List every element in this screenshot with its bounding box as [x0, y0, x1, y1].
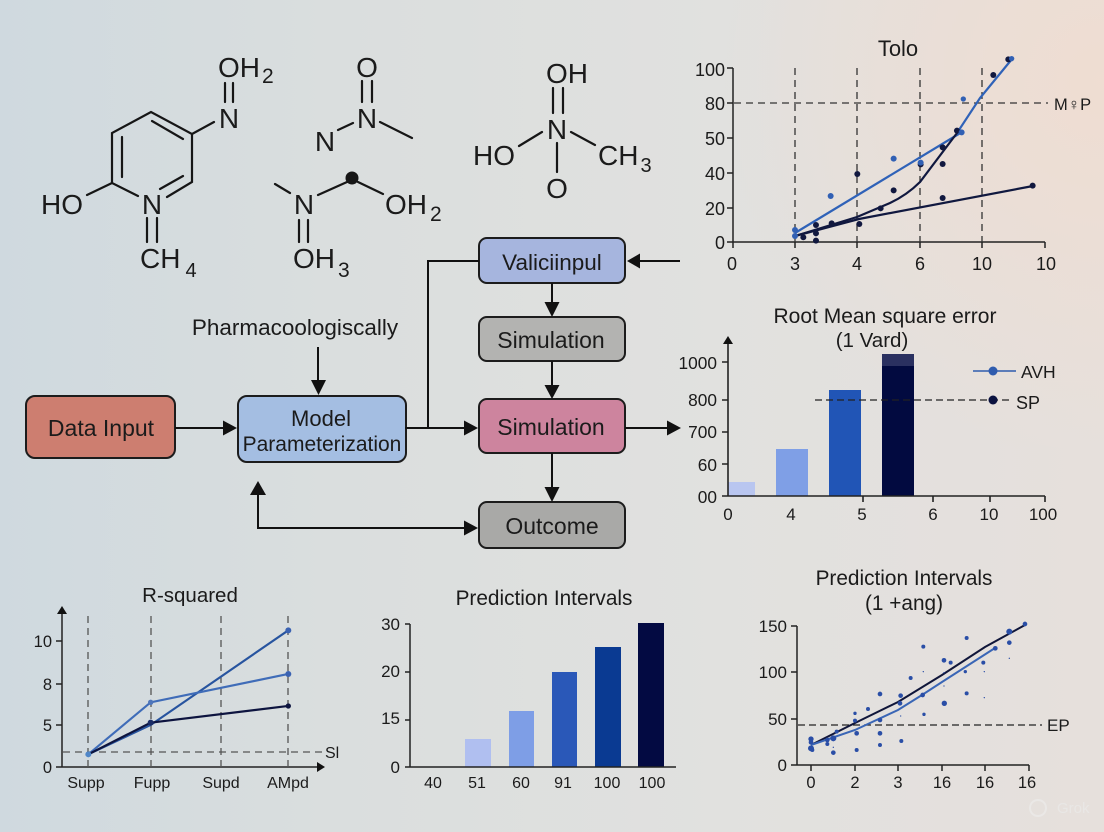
molecule: nitroso fragment: N: [357, 103, 377, 134]
molecule: lower fragment: N: [294, 189, 314, 220]
axis arrowheads: [57, 606, 325, 772]
chart title: Root Mean square error: [774, 305, 996, 328]
molecule: ring structure: N: [142, 189, 162, 220]
chart title: Prediction Intervals: [816, 567, 992, 590]
chart: Tolo line scatter: [695, 36, 1091, 274]
molecule: right structure: N: [547, 114, 567, 145]
y-axis labels: 100: [759, 663, 787, 682]
x-axis labels: [67, 775, 309, 792]
x-axis labels: 2: [850, 774, 860, 792]
molecule: nitroso fragment: O: [356, 52, 378, 83]
y-axis labels: 150: [759, 617, 787, 636]
x-axis labels: 16: [976, 774, 994, 792]
y-axis labels: 0: [391, 758, 400, 777]
molecule: ring structure: [41, 52, 274, 282]
x-axis labels: 4: [852, 254, 862, 274]
x-axis labels: 3: [790, 254, 800, 274]
y-axis labels: [759, 617, 787, 775]
series lines: [795, 59, 1033, 236]
x-axis labels: 40: [424, 775, 442, 792]
y-axis labels: [381, 615, 400, 777]
reference label: EP: [1047, 716, 1070, 735]
arrow: pharmacologically to model: [311, 347, 326, 395]
x-axis labels: 51: [468, 775, 486, 792]
y-axis labels: 20: [705, 199, 725, 219]
y-axis labels: 60: [698, 455, 717, 475]
arrow: data input to model: [175, 420, 237, 436]
x-axis labels: 60: [512, 775, 530, 792]
axes: [727, 68, 1045, 248]
x-axis labels: Supp: [67, 775, 105, 792]
molecule: lower fragment: 2: [430, 203, 442, 226]
x-axis labels: 5: [857, 505, 867, 524]
x-axis labels: 4: [786, 505, 796, 524]
molecule: lower fragment: OH: [293, 243, 335, 274]
box: outcome: Outcome: [505, 513, 599, 539]
x-axis labels: 0: [727, 254, 737, 274]
x-axis labels: 10: [972, 254, 992, 274]
flowchart: [26, 238, 681, 548]
box: simulation pink: Simulation: [497, 414, 605, 440]
x-axis labels: [727, 254, 1056, 274]
molecule: lower fragment: OH: [385, 189, 427, 220]
box: simulation grey: Simulation: [497, 327, 605, 353]
watermark: Grok: [1057, 800, 1090, 817]
arrow: incoming to validation input: [627, 254, 680, 268]
bars: [465, 623, 664, 767]
x-axis labels: 10: [980, 505, 998, 524]
molecule: ring structure: OH: [218, 52, 260, 83]
box: model parameterization: Model: [291, 406, 351, 431]
x-axis labels: 100: [1029, 505, 1057, 524]
trend lines: [811, 625, 1025, 745]
reference lines: [63, 616, 322, 767]
x-axis labels: [806, 774, 1036, 792]
y-axis labels: [695, 60, 725, 253]
scatter points: [808, 622, 1027, 755]
series lines and points: [85, 627, 291, 757]
box: model parameterization: [238, 396, 406, 462]
arrow: model to simulation: [405, 420, 478, 436]
chart: root mean square error bars: [679, 305, 1057, 524]
molecule: right structure: O: [546, 173, 568, 204]
chart: R-squared lines: [34, 584, 339, 792]
arrow: simulation to charts: [625, 420, 681, 436]
y-axis labels: 30: [381, 615, 400, 634]
reference lines: [734, 68, 1048, 242]
x-axis labels: 100: [594, 775, 620, 792]
axes: [405, 624, 676, 767]
arrow: validation to simulation: [544, 283, 560, 317]
legend: [973, 362, 1056, 413]
x-axis labels: 16: [1018, 774, 1036, 792]
y-axis labels: 10: [34, 633, 52, 651]
chart: prediction intervals scatter: [759, 567, 1070, 792]
box: model parameterization: Parameterization: [243, 433, 401, 456]
molecule: right structure: [473, 58, 652, 204]
connector: model to validation input: [428, 261, 479, 428]
label: pharmacologically: Pharmacoologiscally: [192, 315, 399, 340]
arrow: outcome feedback to model: [250, 481, 478, 536]
bars: [728, 354, 914, 496]
arrow: simulation to outcome: [544, 453, 560, 502]
y-axis labels: 800: [688, 390, 717, 410]
box: data input: Data Input: [48, 415, 155, 441]
y-axis labels: 700: [688, 422, 717, 442]
y-axis labels: 5: [43, 717, 52, 735]
x-axis labels: 10: [1036, 254, 1056, 274]
box: validation input: [479, 238, 625, 283]
panel: chemical structures: [41, 52, 652, 282]
y-axis labels: 100: [695, 60, 725, 80]
chart title: (1 +ang): [865, 592, 943, 615]
chart title: Tolo: [878, 36, 918, 61]
y-axis labels: 0: [43, 759, 52, 777]
watermark: [1030, 800, 1090, 817]
x-axis labels: 0: [723, 505, 733, 524]
molecule: right structure: CH: [598, 140, 638, 171]
reference label: Sl: [325, 745, 339, 762]
x-axis labels: 16: [933, 774, 951, 792]
molecule: right structure: HO: [473, 140, 515, 171]
reference line: [815, 399, 1013, 401]
chart title: [816, 567, 992, 615]
x-axis labels: 100: [639, 775, 665, 792]
y-axis labels: 0: [778, 756, 787, 775]
molecule: lower fragment: 3: [338, 259, 350, 282]
x-axis labels: [723, 505, 1057, 524]
data points: [792, 56, 1036, 244]
axes: [722, 342, 1045, 502]
background tint: [700, 0, 1104, 500]
legend: AVH: [1021, 362, 1056, 382]
molecule: ring structure: 2: [262, 65, 274, 88]
molecule: right structure: OH: [546, 58, 588, 89]
x-axis labels: [424, 775, 665, 792]
axes: [56, 612, 318, 767]
x-axis labels: 91: [554, 775, 572, 792]
molecule: ring structure: CH: [140, 243, 180, 274]
x-axis labels: 0: [806, 774, 816, 792]
box: validation input: Valiciinpul: [502, 250, 602, 275]
y-axis labels: 20: [381, 662, 400, 681]
arrow: simulation to simulation: [544, 361, 560, 399]
y-axis labels: 00: [698, 487, 717, 507]
legend: SP: [1016, 393, 1040, 413]
x-axis labels: 6: [915, 254, 925, 274]
y-axis labels: [679, 353, 717, 507]
y-axis labels: 50: [768, 710, 787, 729]
y-axis labels: 50: [705, 129, 725, 149]
y-axis labels: 40: [705, 164, 725, 184]
axes: [791, 626, 1029, 771]
x-axis labels: AMpd: [267, 775, 309, 792]
box: outcome: [479, 502, 625, 548]
y-axis labels: 15: [381, 709, 400, 728]
chart title: R-squared: [142, 584, 238, 607]
reference label: M♀P: [1054, 96, 1091, 114]
molecule: nitroso fragment: N: [315, 126, 335, 157]
molecule: ring structure: 4: [185, 260, 197, 282]
chart title: (1 Vard): [836, 329, 908, 352]
box: simulation pink: [479, 399, 625, 453]
y-axis labels: 0: [715, 233, 725, 253]
y-axis labels: 1000: [679, 353, 717, 373]
x-axis labels: 3: [893, 774, 903, 792]
y-axis labels: 80: [705, 94, 725, 114]
box: data input: [26, 396, 175, 458]
chart: prediction intervals bars: [381, 587, 676, 792]
y-axis labels: 8: [43, 676, 52, 694]
chart title: Prediction Intervals: [456, 587, 632, 610]
x-axis labels: 6: [928, 505, 938, 524]
molecule: lower fragment: [275, 172, 442, 282]
axis arrowhead: [723, 336, 733, 344]
x-axis labels: Supd: [202, 775, 240, 792]
chart title: [774, 305, 996, 352]
x-axis labels: Fupp: [134, 775, 170, 792]
box: simulation grey: [479, 317, 625, 361]
molecule: ring structure: HO: [41, 189, 83, 220]
molecule: nitroso fragment: [315, 52, 412, 157]
molecule: ring structure: N: [219, 103, 239, 134]
reference line: [798, 724, 1042, 726]
y-axis labels: [34, 633, 52, 777]
molecule: right structure: 3: [640, 155, 652, 177]
